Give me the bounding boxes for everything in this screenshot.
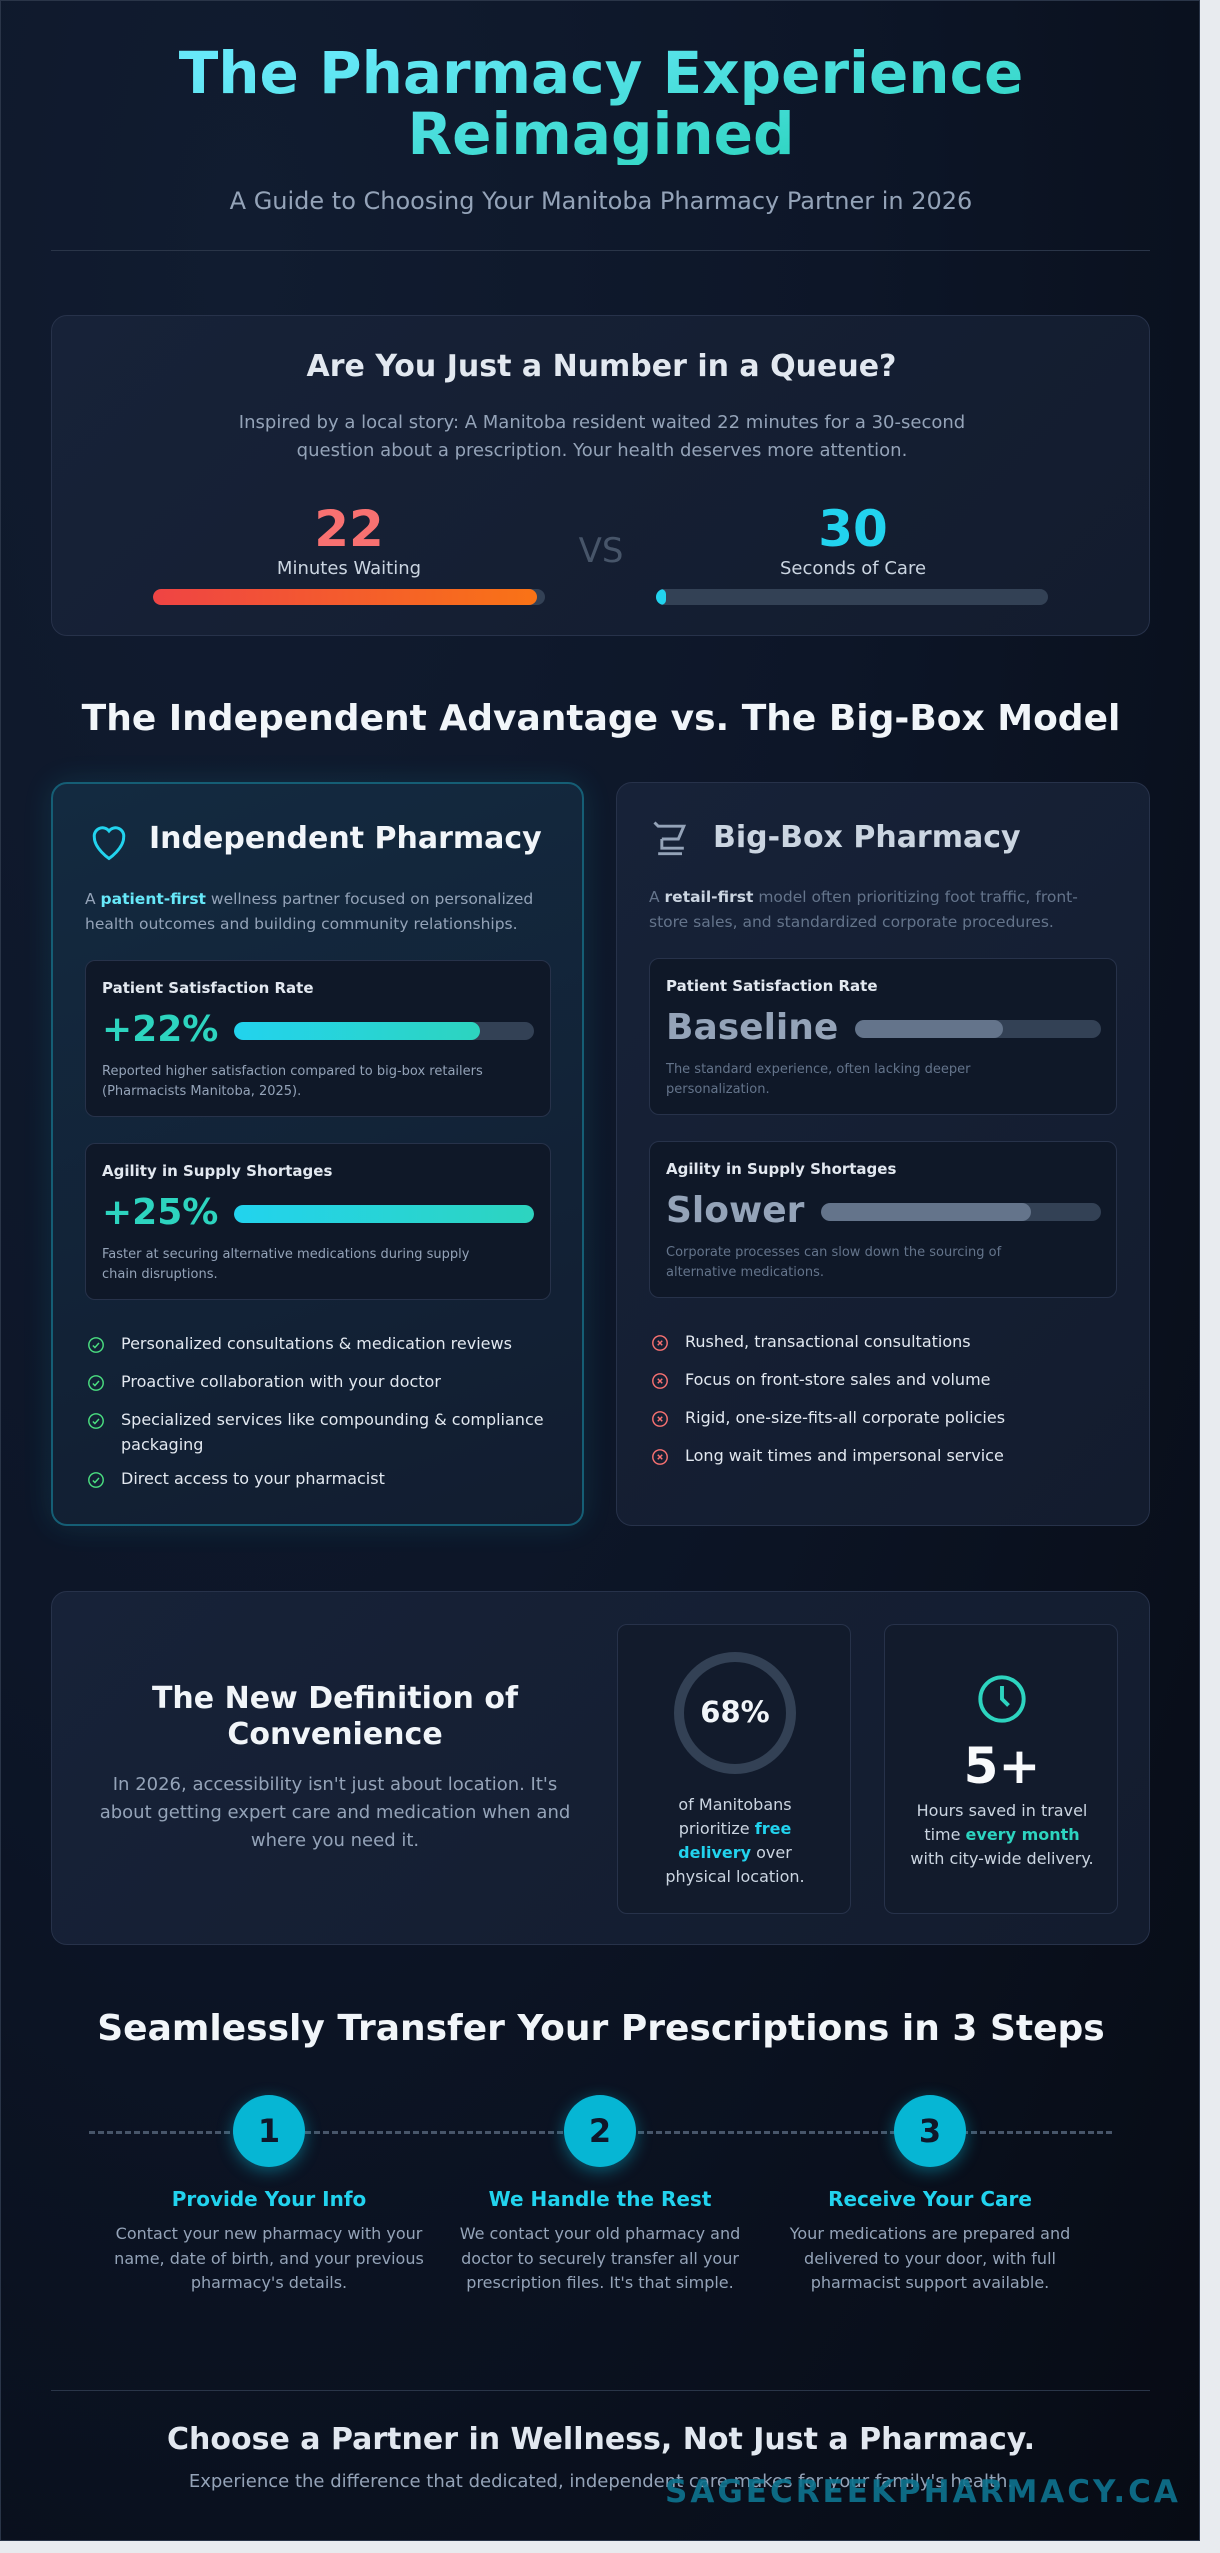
step 2 <box>460 2090 740 2292</box>
icon: heart <box>92 826 126 860</box>
stat: 22 minutes: 22 <box>314 500 384 558</box>
list: benefits <box>88 1334 544 1488</box>
metric: agility: Faster at securing alternative medications during supply chain disruptions. <box>102 1247 469 1282</box>
step 3: 3 <box>919 2112 941 2150</box>
metric: agility <box>85 1143 551 1300</box>
heading: convenience: Convenience <box>227 1717 443 1752</box>
text: story: Inspired by a local story: A Manitoba resident waited 22 minutes for a 30-second question about a prescription. Your health deserves more attention. <box>239 412 965 461</box>
metric: agility: +25% <box>102 1192 218 1233</box>
heading: queue: Are You Just a Number in a Queue? <box>307 349 896 384</box>
step 1: 1 <box>258 2112 280 2150</box>
panel: convenience <box>51 1591 1150 1945</box>
dashed connector line <box>89 2131 1112 2134</box>
title: The Pharmacy Experience <box>179 39 1023 107</box>
text: description: A patient-first wellness partner focused on personalized health outcomes and building community relationships. <box>85 890 533 933</box>
watermark: SAGECREEKPHARMACY.CA <box>665 2474 1181 2510</box>
list: drawbacks: Rigid, one-size-fits-all corporate policies <box>685 1408 1005 1427</box>
metric: agility: Agility in Supply Shortages <box>666 1160 896 1178</box>
stat: 68%: 68% <box>700 1695 770 1729</box>
step 1 <box>114 2090 424 2292</box>
step 2: We contact your old pharmacy and doctor to securely transfer all your prescription files. It's that simple. <box>460 2224 740 2292</box>
step 1: Contact your new pharmacy with your name, date of birth, and your previous pharmacy's details. <box>114 2224 424 2292</box>
stat: 30 seconds <box>780 500 926 579</box>
panel: queue <box>51 315 1150 636</box>
list: drawbacks: Focus on front-store sales and volume <box>685 1370 990 1389</box>
list: drawbacks: Rushed, transactional consultations <box>685 1332 971 1351</box>
metric: satisfaction: The standard experience, often lacking deeper personalization. <box>666 1062 971 1097</box>
list: benefits: Specialized services like compounding & compliance packaging <box>121 1410 544 1454</box>
step 3: Your medications are prepared and delivered to your door, with full pharmacist support available. <box>790 2224 1070 2292</box>
title: Reimagined <box>408 100 794 168</box>
subtitle: A Guide to Choosing Your Manitoba Pharmacy Partner in 2026 <box>230 187 972 215</box>
step 3 <box>790 2090 1070 2292</box>
text: convenience: In 2026, accessibility isn't just about location. It's about getting expert care and medication when and where you need it. <box>100 1774 570 1851</box>
section heading: steps: Seamlessly Transfer Your Prescriptions in 3 Steps <box>97 2008 1105 2049</box>
list: benefits: Personalized consultations & medication reviews <box>121 1334 512 1353</box>
heading: big-box: Big-Box Pharmacy <box>713 820 1021 855</box>
stat: 5+ hours: Hours saved in travel time every month with city-wide delivery. <box>910 1801 1094 1868</box>
stat: 22 minutes: Minutes Waiting <box>277 558 421 579</box>
metric: agility <box>649 1141 1117 1298</box>
bar: waiting <box>153 589 545 605</box>
metric: agility: Agility in Supply Shortages <box>102 1162 332 1180</box>
metric: satisfaction: Baseline <box>666 1007 838 1048</box>
heading: independent: Independent Pharmacy <box>149 821 542 856</box>
title <box>1 43 1201 165</box>
step 2: We Handle the Rest <box>489 2187 711 2211</box>
footer subtitle: Experience the difference that dedicated, independent care makes for your family's health. <box>189 2471 1013 2492</box>
text: description: A retail-first model often prioritizing foot traffic, front-store sales, and standardized corporate procedures. <box>649 888 1078 931</box>
metric: agility: Slower <box>666 1190 804 1231</box>
icon: cart <box>654 822 686 856</box>
vs label: VS <box>579 531 623 571</box>
stat: 22 minutes <box>277 500 421 579</box>
list: drawbacks: Long wait times and impersonal service <box>685 1446 1004 1465</box>
list: benefits: Direct access to your pharmacist <box>121 1469 385 1488</box>
heading: convenience: The New Definition of <box>152 1681 518 1716</box>
stat: 5+ hours <box>884 1624 1118 1914</box>
list: benefits: Proactive collaboration with your doctor <box>121 1372 441 1391</box>
footer heading: Choose a Partner in Wellness, Not Just a Pharmacy. <box>167 2422 1035 2457</box>
stat: 30 seconds: 30 <box>818 500 888 558</box>
metric: satisfaction: +22% <box>102 1009 218 1050</box>
list: drawbacks <box>652 1332 1005 1465</box>
panel: big-box <box>616 782 1150 1526</box>
metric: agility: Corporate processes can slow down the sourcing of alternative medications. <box>666 1245 1001 1280</box>
stat: 68% <box>617 1624 851 1914</box>
step 2: 2 <box>589 2112 611 2150</box>
section heading: advantage: The Independent Advantage vs. The Big-Box Model <box>82 698 1120 739</box>
step 3: Receive Your Care <box>828 2187 1032 2211</box>
bar: care <box>656 589 1048 605</box>
metric: satisfaction: Patient Satisfaction Rate <box>102 979 314 997</box>
step 1: Provide Your Info <box>172 2187 366 2211</box>
panel: independent <box>51 782 584 1526</box>
metric: satisfaction: Reported higher satisfaction compared to big-box retailers (Pharmacists Manitoba, 2025). <box>102 1064 483 1099</box>
stat: 5+ hours: 5+ <box>964 1737 1040 1795</box>
metric: satisfaction <box>85 960 551 1117</box>
metric: satisfaction <box>649 958 1117 1115</box>
stat: 68%: of Manitobans prioritize free delivery over physical location. <box>665 1795 805 1886</box>
metric: satisfaction: Patient Satisfaction Rate <box>666 977 878 995</box>
stat: 30 seconds: Seconds of Care <box>780 558 926 579</box>
heading: convenience <box>152 1681 518 1752</box>
